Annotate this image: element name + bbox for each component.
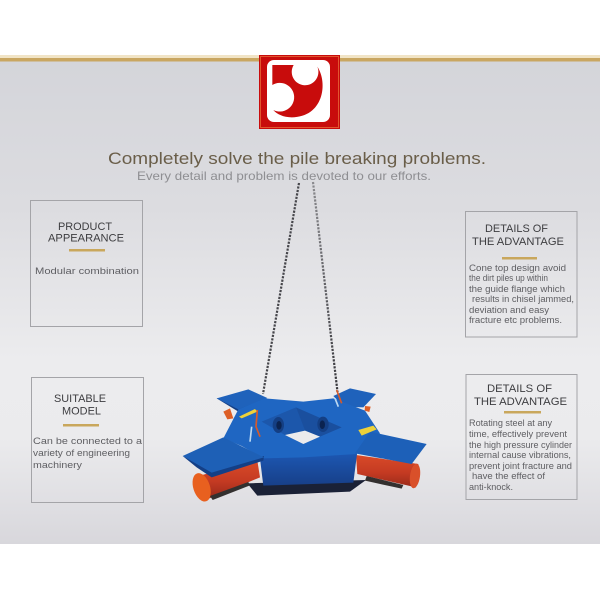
panel heading: product appearance bbox=[48, 221, 124, 244]
panel text: rotating steel: the high pressure cylinder bbox=[469, 440, 573, 451]
top right paddle bbox=[333, 388, 376, 407]
panel text: rotating steel: have the effect of bbox=[472, 471, 545, 482]
undercarriage bbox=[247, 480, 366, 496]
panel: details of the advantage, rotating steel bbox=[466, 374, 577, 500]
panel heading: details of the advantage bbox=[472, 223, 564, 248]
panel heading: details of the advantage bbox=[474, 383, 567, 408]
pile breaker machine bbox=[183, 388, 427, 504]
left hydraulic cylinder bbox=[189, 461, 260, 504]
title: Completely solve the pile breaking problems. bbox=[108, 149, 486, 168]
left lower paddle bbox=[183, 437, 264, 473]
logo bbox=[259, 55, 340, 129]
panel: suitable model bbox=[32, 378, 144, 502]
panel heading: suitable model bbox=[54, 393, 106, 418]
top left paddle underside bbox=[217, 398, 267, 412]
right lower paddle bbox=[355, 432, 427, 464]
panel: product appearance bbox=[30, 200, 142, 326]
small orange fittings bbox=[223, 408, 233, 419]
panel heading: details of the advantage: DETAILS OF bbox=[487, 383, 552, 395]
panel text: cone top design: the guide flange which bbox=[469, 284, 565, 295]
top left paddle bbox=[217, 389, 267, 409]
panel heading: product appearance: PRODUCT bbox=[58, 221, 112, 233]
chain shackles and hoses bbox=[250, 390, 342, 442]
round ports bbox=[273, 417, 329, 433]
panel text: rotating steel: anti-knock. bbox=[469, 482, 513, 493]
panel heading: details of the advantage: THE ADVANTAGE bbox=[474, 396, 567, 408]
white hole bbox=[285, 431, 320, 444]
yellow warning labels bbox=[239, 409, 377, 436]
panel text: modular combination: Modular combination bbox=[35, 266, 139, 277]
panel text: rotating steel: internal cause vibrations, bbox=[469, 450, 571, 461]
panel heading: details of the advantage: DETAILS OF bbox=[485, 223, 548, 235]
panel text: rotating steel: Rotating steel at any bbox=[469, 418, 552, 429]
panel text: cone top design: fracture etc problems. bbox=[469, 315, 562, 326]
left lower paddle underside bbox=[183, 456, 264, 477]
panel heading: product appearance: APPEARANCE bbox=[48, 232, 124, 244]
subtitle: Every detail and problem is devoted to our efforts. bbox=[137, 169, 431, 183]
panel heading: suitable model: MODEL bbox=[62, 406, 101, 418]
panel text: rotating steel: time, effectively prevent bbox=[469, 429, 567, 440]
panel text: suitable machinery bbox=[33, 436, 143, 471]
gold header stripe bbox=[0, 55, 600, 62]
main deck bbox=[223, 398, 380, 458]
panel: details of the advantage, cone top bbox=[466, 212, 577, 337]
right hydraulic cylinder bbox=[356, 455, 422, 489]
lifting chains bbox=[263, 182, 338, 394]
panel text: cone top design: Cone top design avoid bbox=[469, 263, 566, 274]
panel text: cone top design: the dirt piles up within bbox=[469, 273, 548, 284]
front face bbox=[259, 452, 357, 486]
panel text: suitable machinery: variety of engineering bbox=[33, 448, 130, 459]
panel text: rotating steel: prevent joint fracture and bbox=[469, 461, 572, 472]
panel text: rotating steel bbox=[469, 418, 573, 493]
panel text: cone top design: results in chisel jammed, bbox=[472, 294, 574, 305]
panel text: suitable machinery: Can be connected to a bbox=[33, 436, 143, 447]
panel text: cone top design: deviation and easy bbox=[469, 305, 549, 316]
central opening walls bbox=[262, 407, 342, 437]
panel text: cone top design bbox=[469, 263, 574, 326]
panel text: suitable machinery: machinery bbox=[33, 460, 82, 471]
panel heading: suitable model: SUITABLE bbox=[54, 393, 106, 405]
panel heading: details of the advantage: THE ADVANTAGE bbox=[472, 236, 564, 248]
